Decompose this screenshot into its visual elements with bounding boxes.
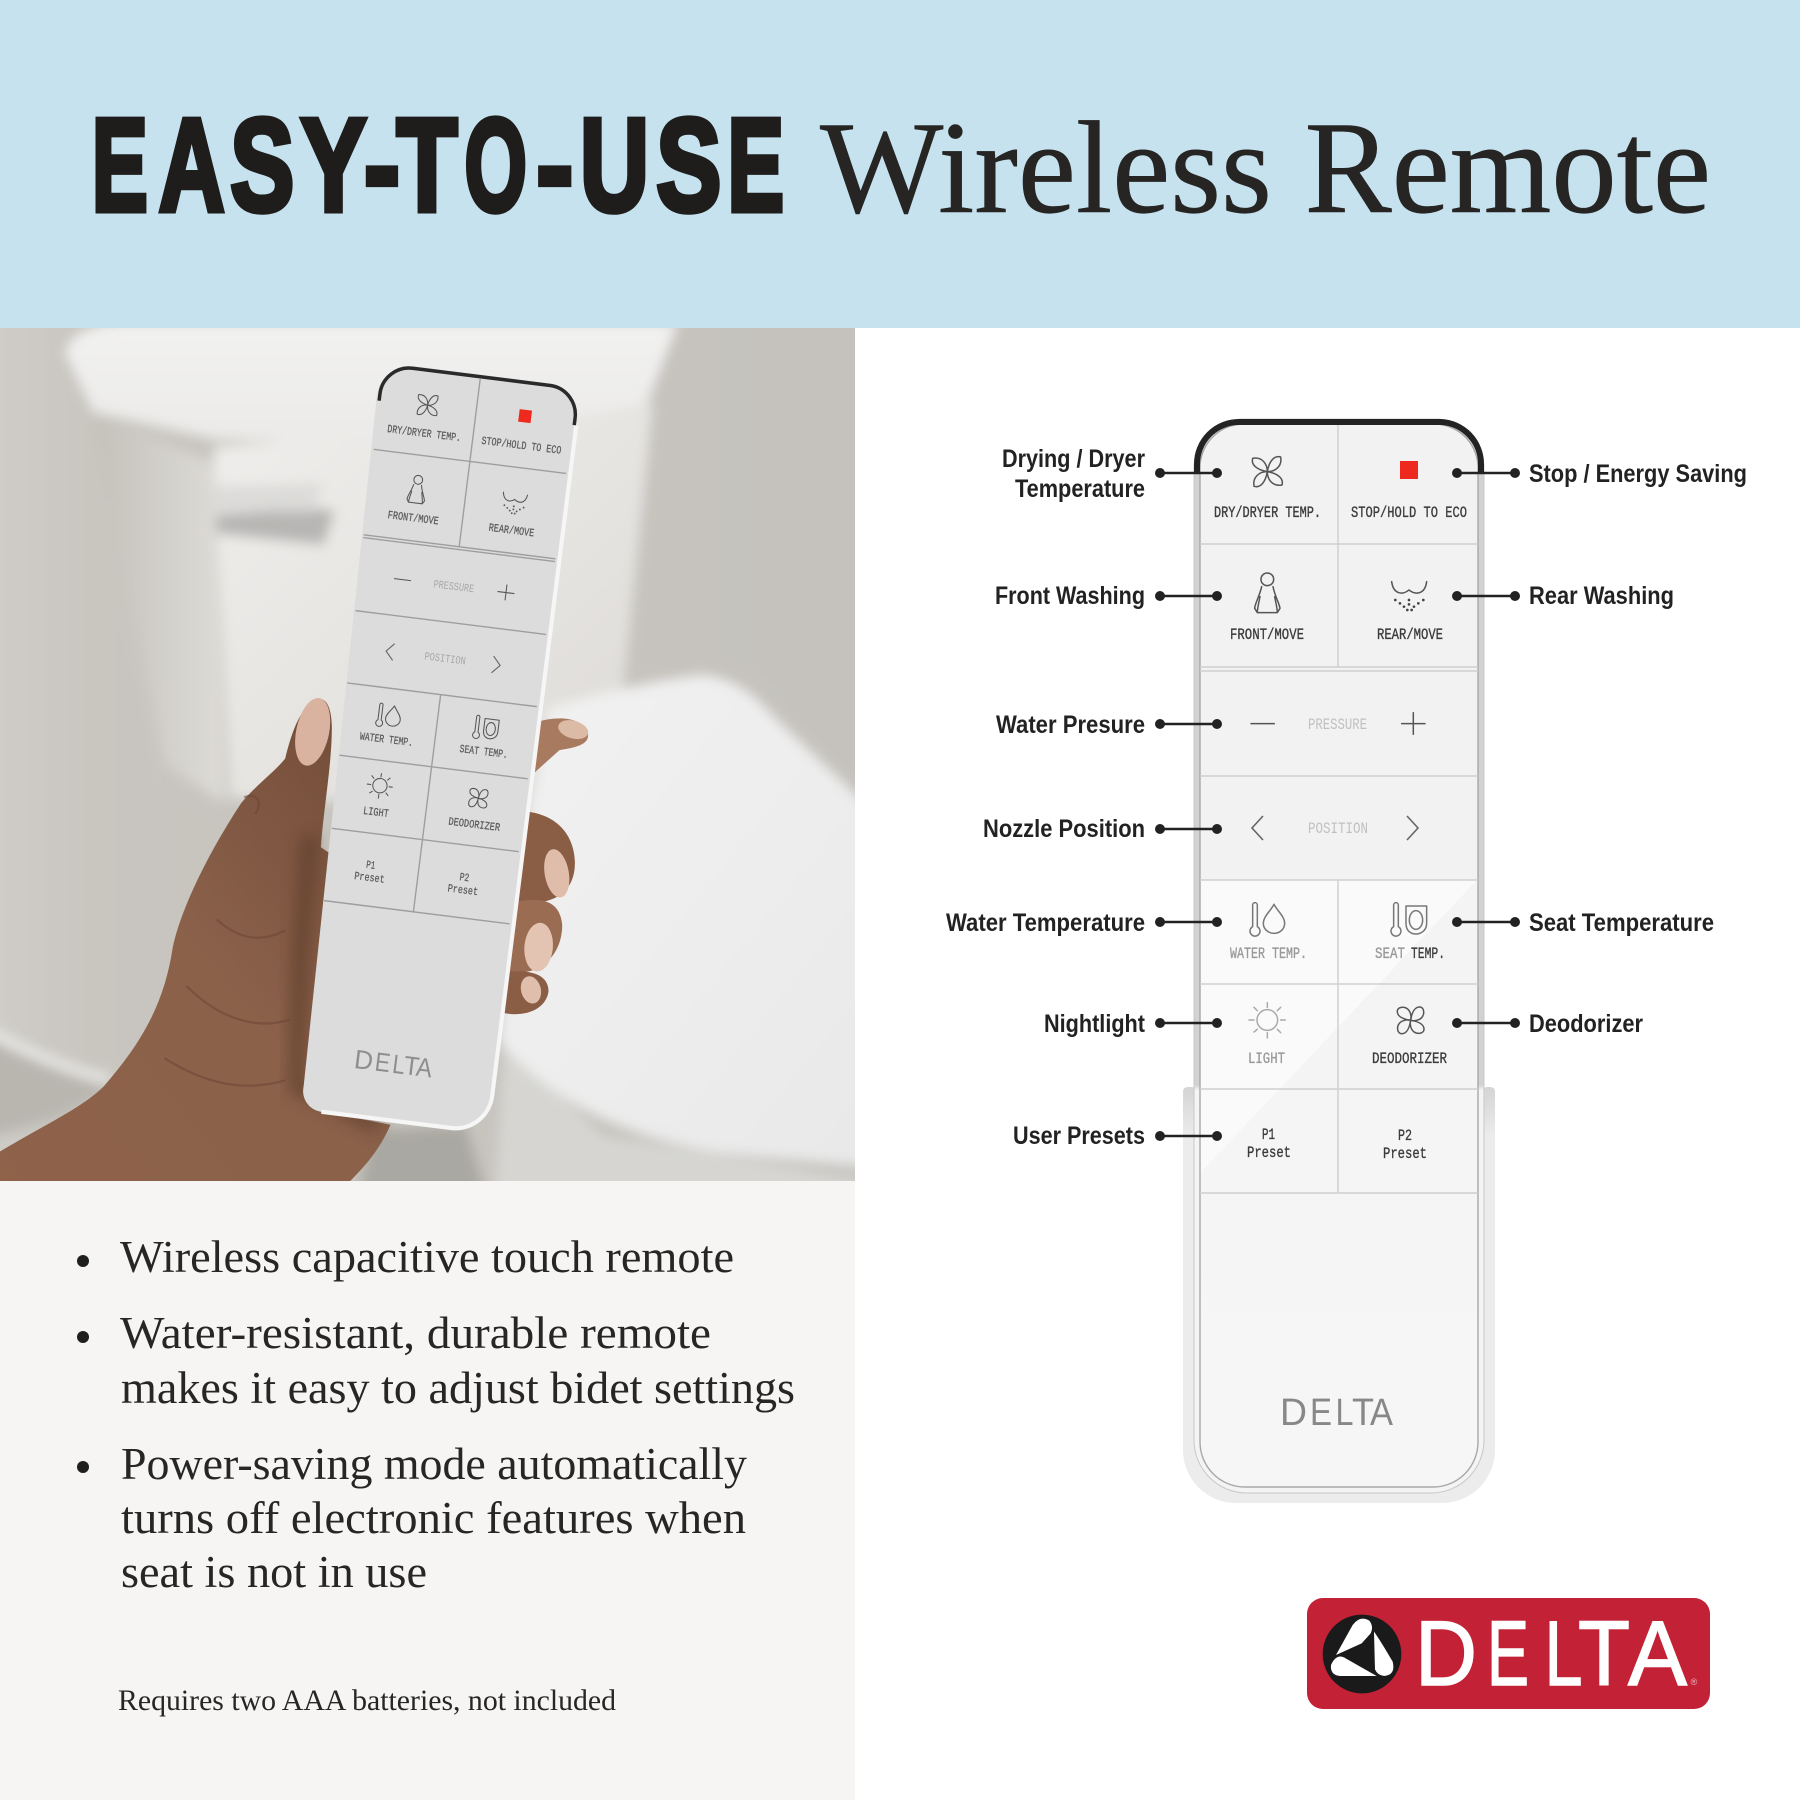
header band: [0, 0, 1800, 328]
remote in photo: [288, 362, 581, 1133]
icon: stop square: [1400, 461, 1418, 479]
callout labels left: Nightlight: [1044, 1010, 1146, 1038]
hand palm and thumb: [0, 695, 391, 1186]
button labels: SEAT: [1375, 945, 1405, 963]
callout labels right: Deodorizer: [1529, 1010, 1643, 1038]
logo wordmark: D: [1415, 1603, 1477, 1705]
remote wordmark: D: [1280, 1392, 1307, 1434]
button labels: WATER TEMP.: [1230, 945, 1307, 963]
callout labels right: Rear Washing: [1529, 582, 1674, 610]
remote in photo: WATER TEMP.: [359, 731, 414, 750]
remote wordmark: [1280, 1392, 1394, 1434]
title: -: [536, 92, 573, 238]
remote in photo: D: [353, 1044, 375, 1076]
callout labels left: Drying / Dryer: [1002, 445, 1145, 473]
callout labels left: Front Washing: [995, 582, 1145, 610]
remote in photo: A: [414, 1052, 434, 1084]
remote in photo: SEAT TEMP.: [459, 744, 508, 762]
title: A: [159, 92, 225, 238]
bullet list: Water-resistant, durable remote: [120, 1308, 711, 1358]
panel: feature bullets: [0, 1181, 855, 1800]
button labels: REAR/MOVE: [1377, 626, 1443, 644]
button labels: P2: [1398, 1127, 1412, 1145]
title: O: [464, 92, 527, 238]
remote top edge: [1197, 422, 1481, 474]
remote in photo: Preset: [354, 871, 385, 887]
remote in photo: T: [402, 1050, 421, 1082]
logo wordmark: [1415, 1603, 1688, 1705]
remote wordmark: E: [1310, 1392, 1332, 1434]
remote body: [1194, 419, 1484, 1493]
title: S: [656, 92, 721, 238]
title: U: [580, 92, 649, 238]
callout labels left: Water Temperature: [946, 909, 1145, 937]
button labels: TEMP.: [1411, 945, 1445, 963]
button labels: Preset: [1383, 1145, 1427, 1163]
remote in photo: STOP/HOLD TO ECO: [481, 436, 562, 458]
button labels: LIGHT: [1248, 1050, 1285, 1068]
remote in photo: L: [391, 1049, 407, 1080]
callout labels left: [946, 445, 1146, 1150]
button labels: POSITION: [1308, 820, 1368, 838]
title: T: [397, 92, 457, 238]
callout labels left: Nozzle Position: [983, 815, 1145, 843]
Delta logo: [1307, 1598, 1710, 1709]
remote in photo: LIGHT: [362, 806, 390, 821]
title: -: [364, 92, 400, 238]
icons: temperature, light, deodorizer: [1249, 903, 1427, 1038]
remote in photo: P2: [459, 872, 470, 885]
remote face: [1200, 424, 1478, 1487]
fingers behind the remote: [504, 718, 588, 1014]
title: E: [92, 92, 148, 238]
title: Wireless Remote: [820, 94, 1711, 241]
bullet list: Power-saving mode automatically: [121, 1439, 747, 1489]
logo wordmark: L: [1544, 1603, 1582, 1705]
remote in photo: Preset: [447, 883, 479, 899]
logo wordmark: A: [1628, 1603, 1688, 1705]
bullet list: makes it easy to adjust bidet settings: [121, 1363, 795, 1413]
button labels: Preset: [1247, 1144, 1291, 1162]
bullet list: turns off electronic features when: [121, 1493, 746, 1543]
remote in photo: REAR/MOVE: [488, 523, 535, 540]
icons: fan, front wash, rear wash, pressure: [1251, 457, 1427, 734]
Delta logo: ®: [1691, 1677, 1698, 1687]
remote in photo: DRY/DRYER TEMP.: [387, 424, 462, 445]
button labels: PRESSURE: [1308, 716, 1367, 734]
callout labels right: Seat Temperature: [1529, 909, 1714, 937]
bullet list: Wireless capacitive touch remote: [120, 1232, 734, 1282]
callout labels right: Stop / Energy Saving: [1529, 460, 1747, 488]
bullet list: seat is not in use: [121, 1547, 427, 1597]
battery note: Requires two AAA batteries, not included: [118, 1684, 616, 1717]
button labels: [1214, 504, 1467, 1163]
button labels: DRY/DRYER TEMP.: [1214, 504, 1321, 522]
logo wordmark: E: [1487, 1603, 1529, 1705]
callout labels right: [1529, 460, 1747, 1038]
button labels: P1: [1262, 1126, 1275, 1144]
button labels: FRONT/MOVE: [1230, 626, 1304, 644]
remote in photo: P1: [365, 860, 376, 873]
remote in photo: E: [373, 1046, 392, 1078]
remote in photo: POSITION: [424, 651, 466, 669]
remote wordmark: T: [1352, 1392, 1374, 1434]
bullet list: [77, 1232, 795, 1597]
title: Y: [301, 92, 366, 238]
logo wordmark: T: [1578, 1603, 1630, 1705]
callout labels left: Temperature: [1015, 475, 1145, 503]
callout labels left: User Presets: [1013, 1122, 1145, 1150]
panel: remote diagram: [946, 419, 1747, 1503]
title: E: [728, 92, 784, 238]
remote in photo: FRONT/MOVE: [387, 510, 439, 528]
icon: Delta triangle mark: [1323, 1615, 1401, 1693]
icons: position chevrons: [1252, 816, 1418, 840]
callout labels left: Water Presure: [996, 711, 1145, 739]
panel: photo of hand holding remote: [0, 328, 855, 1181]
remote wordmark: L: [1336, 1392, 1354, 1434]
remote wordmark: A: [1370, 1392, 1394, 1434]
button labels: DEODORIZER: [1372, 1050, 1447, 1068]
title: [92, 92, 1711, 241]
callout leader lines: [1155, 468, 1520, 1141]
remote in photo: DEODORIZER: [448, 817, 501, 835]
button labels: STOP/HOLD TO ECO: [1351, 504, 1467, 522]
title: S: [230, 92, 294, 238]
remote in photo: PRESSURE: [433, 579, 475, 596]
remote stand: [1183, 1087, 1495, 1503]
